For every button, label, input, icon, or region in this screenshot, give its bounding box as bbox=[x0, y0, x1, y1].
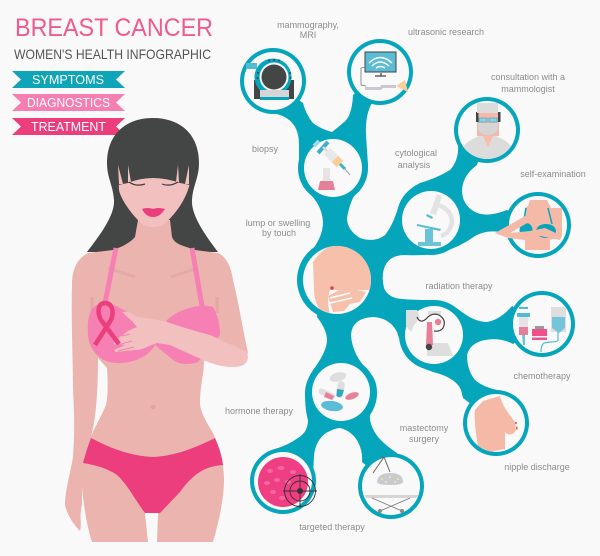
label: biopsy: biopsy bbox=[252, 144, 279, 154]
label: cytological analysis: analysis bbox=[398, 160, 431, 170]
label: radiation therapy: radiation therapy bbox=[425, 281, 493, 291]
label: ultrasonic research: ultrasonic research bbox=[408, 27, 484, 37]
label: consultation with a mammologist: mammologist bbox=[501, 84, 555, 94]
node: mammography bbox=[240, 48, 306, 114]
node: radiation therapy bbox=[399, 300, 469, 370]
label: lump or swelling by touch bbox=[246, 218, 310, 238]
bra straps bbox=[105, 248, 202, 306]
label: consultation with a mammologist: consultation with a bbox=[491, 72, 565, 82]
node: mastectomy surgery bbox=[358, 453, 424, 519]
ribbon: symptoms: SYMPTOMS bbox=[32, 73, 104, 87]
label: cytological analysis bbox=[395, 148, 437, 170]
node: chemotherapy bbox=[509, 291, 575, 357]
label: mastectomy surgery: mastectomy bbox=[400, 423, 449, 433]
fingers bbox=[118, 334, 134, 351]
label: cytological analysis: cytological bbox=[395, 148, 437, 158]
hair partings bbox=[118, 165, 189, 184]
label: mammography, MRI bbox=[277, 20, 339, 40]
node: nipple discharge bbox=[463, 390, 529, 456]
underwear bbox=[83, 438, 223, 513]
ribbon: diagnostics: DIAGNOSTICS bbox=[27, 96, 110, 110]
label: consultation with a mammologist bbox=[491, 72, 565, 94]
label: lump or swelling by touch: lump or swelling bbox=[246, 218, 310, 228]
bra cups bbox=[88, 304, 155, 363]
node: hormone therapy pills bbox=[306, 357, 376, 427]
node: cytological analysis microscope bbox=[396, 185, 466, 255]
label: nipple discharge: nipple discharge bbox=[504, 462, 570, 472]
ribbon: treatment bbox=[12, 118, 125, 135]
label: mastectomy surgery bbox=[400, 423, 449, 444]
teal network of connectors bbox=[273, 72, 542, 486]
ribbon: symptoms bbox=[12, 71, 125, 88]
collarbones bbox=[108, 268, 198, 277]
label: targeted therapy: targeted therapy bbox=[299, 522, 365, 532]
node: ultrasonic research bbox=[347, 39, 413, 105]
node: consultation with a mammologist bbox=[454, 97, 520, 163]
label: chemotherapy: chemotherapy bbox=[513, 371, 571, 381]
body bbox=[65, 220, 248, 542]
lips bbox=[142, 208, 165, 217]
label: hormone therapy: hormone therapy bbox=[225, 406, 294, 416]
arm bbox=[113, 312, 248, 367]
subtitle: WOMEN'S HEALTH INFOGRAPHIC bbox=[14, 46, 211, 62]
title: BREAST CANCER bbox=[15, 14, 213, 42]
ribbon: diagnostics bbox=[12, 94, 125, 111]
armpit creases bbox=[92, 297, 217, 313]
bangs bbox=[114, 148, 193, 185]
label: mastectomy surgery: surgery bbox=[409, 434, 440, 444]
hair bbox=[87, 118, 218, 252]
navel bbox=[150, 405, 156, 409]
gap between arm and torso bbox=[91, 358, 108, 436]
label: mammography, MRI: mammography, bbox=[277, 20, 339, 30]
node: self-examination bbox=[495, 192, 571, 258]
label: self-examination: self-examination bbox=[520, 169, 586, 179]
woman figure bbox=[65, 118, 248, 542]
label: lump or swelling by touch: by touch bbox=[262, 228, 296, 238]
node: targeted therapy bbox=[250, 448, 317, 514]
node: biopsy bbox=[298, 133, 368, 203]
node: lump or swelling by touch bbox=[297, 246, 371, 315]
eyes bbox=[129, 182, 178, 185]
awareness ribbon bbox=[95, 303, 119, 345]
face bbox=[118, 160, 190, 227]
label: mammography, MRI: MRI bbox=[300, 30, 316, 40]
ribbon: treatment: TREATMENT bbox=[31, 120, 106, 134]
